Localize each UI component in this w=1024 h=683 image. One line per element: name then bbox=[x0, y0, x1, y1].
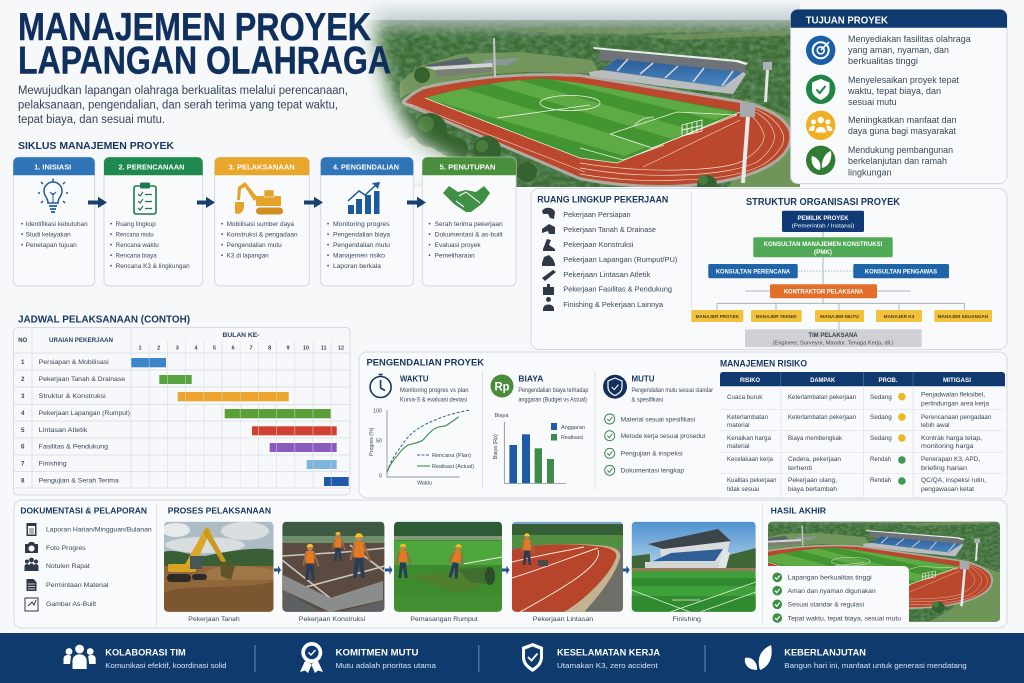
risk table: biaya bertambah bbox=[788, 486, 837, 493]
gantt chart table: URAIAN PEKERJAAN bbox=[49, 338, 113, 344]
bar chart: anggaran vs realisasi bbox=[493, 413, 585, 483]
icon: leaf bbox=[806, 146, 835, 175]
org chart: struktur organisasi proyek: KONTRAKTOR PELAKSANA bbox=[784, 288, 863, 296]
line chart: progres: 100 bbox=[373, 408, 382, 414]
risk table: lebih awal bbox=[921, 422, 950, 429]
footer band: Utamakan K3, zero accident bbox=[557, 661, 659, 670]
panel: tujuan proyek: waktu, tepat biaya, dan bbox=[847, 86, 941, 96]
risk table: monitoring harga bbox=[921, 443, 974, 450]
risk table: Cuaca buruk bbox=[727, 394, 763, 401]
panel: 4 pengendalian: Manajemen risiko bbox=[333, 254, 386, 260]
block: mutu with checklist: Dokumentasi lengkap bbox=[621, 468, 684, 475]
panel: 4 pengendalian: Pengendalian mutu bbox=[333, 243, 390, 249]
gantt chart table: 6 bbox=[231, 346, 235, 352]
org chart: struktur organisasi proyek: (PMK) bbox=[814, 250, 832, 256]
captions for process photos: Finishing bbox=[672, 616, 701, 623]
icon: quality shield bbox=[603, 375, 627, 399]
panel: 4 pengendalian: Pengendalian biaya bbox=[333, 232, 391, 238]
line chart: progres: Waktu bbox=[417, 480, 432, 486]
risk table: material bbox=[727, 443, 750, 450]
org chart: struktur organisasi proyek: MANAJER PROYEK bbox=[696, 314, 739, 320]
block: dokumentasi dan pelaporan: Foto Progres bbox=[46, 545, 86, 552]
line chart: progres: Rencana (Plan) bbox=[432, 453, 471, 459]
gantt chart table: 4 bbox=[21, 410, 25, 417]
title: LAPANGAN OLAHRAGA bbox=[18, 40, 391, 82]
risk table: RISIKO bbox=[740, 377, 760, 384]
panel: bottom strip bbox=[14, 500, 1007, 628]
panel: 3 pelaksanaan: • bbox=[221, 243, 223, 249]
org chart: struktur organisasi proyek: MANAJER K3 bbox=[884, 314, 915, 320]
ruang lingkup pekerjaan list: Finishing & Pekerjaan Lainnya bbox=[563, 300, 664, 309]
panel: 4 pengendalian: Laporan berkala bbox=[333, 264, 382, 270]
risk table: Keterlambatan pekerjaan bbox=[788, 414, 856, 421]
bar chart: anggaran vs realisasi: Realisasi bbox=[561, 435, 583, 441]
panel: 3 pelaksanaan: • bbox=[221, 254, 223, 260]
panel: tujuan proyek: Menyelesaikan proyek tepat bbox=[848, 75, 959, 85]
block: dokumentasi dan pelaporan: Gambar As-Built bbox=[46, 601, 96, 608]
captions for process photos: Pekerjaan Konstruksi bbox=[299, 616, 365, 623]
gantt chart table: 11 bbox=[321, 346, 327, 352]
gantt chart table: 3 bbox=[21, 393, 25, 400]
risk table bbox=[720, 372, 1005, 498]
panel: 3 pelaksanaan: 3. PELAKSANAAN bbox=[229, 162, 295, 172]
subtitle bbox=[18, 85, 348, 126]
risk table: Pekerjaan ulang, bbox=[788, 477, 837, 484]
gantt chart table: 6 bbox=[21, 443, 25, 450]
panel: 1 inisiasi: Identifikasi kebutuhan bbox=[26, 222, 88, 228]
block: dokumentasi dan pelaporan: Laporan Harian/Mingguan/Bulanan bbox=[46, 526, 152, 534]
org chart: struktur organisasi proyek: TIM PELAKSANA bbox=[808, 332, 858, 339]
icon: excavator bbox=[235, 182, 283, 214]
panel: tujuan proyek: berkelanjutan dan ramah bbox=[848, 156, 947, 166]
ruang lingkup pekerjaan list: Pekerjaan Lintasan Atletik bbox=[563, 270, 651, 279]
gantt chart table: Pekerjaan Tanah & Drainase bbox=[39, 376, 125, 383]
gantt chart table: Finishing bbox=[39, 460, 67, 467]
panel: tujuan proyek: berkualitas tinggi bbox=[848, 56, 918, 66]
block: mutu with checklist: Pengendalian mutu sesuai standar bbox=[632, 387, 714, 394]
block: biaya with bar chart: BIAYA bbox=[518, 374, 543, 384]
gantt bars bbox=[131, 358, 349, 486]
risk table: briefing harian bbox=[921, 465, 967, 472]
hero photo: stadium aerial bbox=[363, 2, 800, 187]
panel: 1 inisiasi bbox=[13, 157, 95, 286]
panel: 1 inisiasi: • bbox=[21, 222, 23, 228]
panel: 1 inisiasi: • bbox=[21, 243, 23, 249]
gantt chart table: 5 bbox=[21, 427, 25, 434]
org chart: struktur organisasi proyek: STRUKTUR ORGANISASI PROYEK bbox=[746, 197, 901, 208]
panel: 5 penutupan: Dokumentasi & as-built bbox=[435, 232, 503, 238]
block: mutu with checklist: MUTU bbox=[632, 374, 654, 384]
org chart: struktur organisasi proyek bbox=[691, 191, 992, 347]
gantt chart table: 4 bbox=[194, 346, 198, 352]
panel: tujuan proyek bbox=[791, 10, 1007, 184]
panel: ruang lingkup and struktur organisasi bbox=[531, 188, 1007, 350]
heading: jadwal pelaksanaan: JADWAL PELAKSANAAN (CONTOH) bbox=[18, 314, 190, 326]
icon: handshake bbox=[443, 186, 490, 212]
icon: lightbulb bbox=[38, 178, 68, 212]
block: waktu with s-curve chart bbox=[369, 374, 474, 486]
photo: pekerjaan konstruksi bbox=[282, 522, 385, 612]
line chart: progres: Realisasi (Actual) bbox=[432, 464, 474, 470]
risk table: Kenaikan harga bbox=[727, 435, 771, 442]
panel: 4 pengendalian: • bbox=[327, 254, 329, 260]
org chart: struktur organisasi proyek: MANAJER MUTU bbox=[820, 314, 859, 320]
footer band: KOMITMEN MUTU bbox=[336, 648, 419, 658]
icon: quality badge bbox=[300, 642, 323, 673]
risk table: Penjadwalan fleksibel, bbox=[921, 392, 985, 398]
footer band: Komunikasi efektif, koordinasi solid bbox=[105, 661, 226, 670]
panel: 2 perencanaan: Ruang lingkup bbox=[116, 222, 156, 228]
gantt chart table: BULAN KE- bbox=[222, 333, 260, 339]
ruang lingkup pekerjaan list: Pekerjaan Persiapan bbox=[563, 210, 631, 219]
gantt chart table bbox=[14, 328, 350, 495]
panel: pengendalian proyek and manajemen risiko bbox=[359, 352, 1007, 498]
risk table: Kualitas pekerjaan bbox=[727, 477, 777, 484]
gantt chart table: Fasilitas & Pendukung bbox=[39, 443, 108, 450]
icon: growth chart bbox=[348, 182, 380, 214]
risk table: Cedera, pekerjaan bbox=[788, 456, 841, 463]
captions for process photos: Pekerjaan Lintasan bbox=[533, 616, 594, 623]
org chart: struktur organisasi proyek: MANAJER TEKNIK bbox=[756, 314, 797, 320]
panel: tujuan proyek: daya guna bagi masyarakat bbox=[848, 126, 956, 136]
panel: 2 perencanaan: • bbox=[110, 232, 112, 238]
gantt chart table: 7 bbox=[249, 346, 253, 352]
block: dokumentasi dan pelaporan: Permintaan Material bbox=[46, 582, 109, 589]
risk table: Sedang bbox=[870, 414, 892, 421]
line chart: progres: 0 bbox=[379, 474, 382, 480]
panel: 2 perencanaan: • bbox=[110, 243, 112, 249]
panel: 5 penutupan: • bbox=[428, 222, 431, 228]
ruang lingkup pekerjaan list bbox=[537, 194, 678, 311]
panel: 2 perencanaan: Rencana biaya bbox=[116, 254, 157, 260]
gantt chart table: NO bbox=[18, 338, 28, 344]
risk table: Rendah bbox=[870, 477, 891, 484]
panel: tujuan proyek: Mendukung pembangunan bbox=[848, 145, 953, 155]
photo: finishing bbox=[632, 522, 756, 612]
panel: 2 perencanaan: • bbox=[110, 264, 112, 270]
panel: tujuan proyek: sesuai mutu bbox=[848, 97, 897, 107]
panel: 1 inisiasi: • bbox=[21, 232, 23, 238]
arrow bbox=[623, 566, 630, 574]
gantt chart table: Pekerjaan Lapangan (Rumput) bbox=[39, 410, 130, 417]
panel: 2 perencanaan: Rencana mutu bbox=[116, 232, 154, 238]
line chart: progres: 50 bbox=[376, 438, 382, 444]
panel: 3 pelaksanaan: Mobilisasi sumber daya bbox=[227, 222, 295, 228]
gantt chart table: 12 bbox=[338, 346, 344, 352]
risk table: tidak sesuai bbox=[727, 486, 759, 493]
risk table: PROB. bbox=[878, 377, 898, 384]
org chart: struktur organisasi proyek: KONSULTAN PERENCANA bbox=[716, 269, 791, 275]
panel: 1 inisiasi: 1. INISIASI bbox=[34, 162, 71, 172]
panel: 4 pengendalian: 4. PENGENDALIAN bbox=[333, 162, 399, 172]
line chart: progres: Progres (%) bbox=[369, 427, 375, 456]
arrow bbox=[274, 566, 281, 574]
org chart: struktur organisasi proyek: KONSULTAN MANAJEMEN KONSTRUKSI bbox=[764, 242, 883, 248]
photo: hasil akhir stadium bbox=[768, 522, 1000, 622]
footer band bbox=[0, 633, 1024, 683]
icon: leaves bbox=[745, 645, 772, 670]
risk table: terhenti bbox=[788, 465, 812, 472]
panel: 3 pelaksanaan bbox=[215, 157, 309, 286]
risk table: Keterlambatan bbox=[727, 414, 768, 421]
divider bbox=[482, 371, 595, 490]
block: mutu with checklist: Material sesuai spesifikasi bbox=[621, 416, 695, 423]
risk table: Kontrak harga tetap, bbox=[921, 435, 982, 442]
panel: 2 perencanaan: • bbox=[110, 254, 112, 260]
subtitle: pelaksanaan, pengendalian, dan serah terima yang tepat waktu, bbox=[18, 100, 338, 112]
icon: target bbox=[806, 36, 835, 65]
panel: 1 inisiasi: Penetapan tujuan bbox=[26, 243, 77, 249]
heading: proses pelaksanaan: PROSES PELAKSANAAN bbox=[168, 505, 271, 515]
org chart: struktur organisasi proyek: PEMILIK PROYEK bbox=[798, 215, 849, 222]
footer band: KOLABORASI TIM bbox=[105, 648, 186, 658]
photo: pemasangan rumput bbox=[394, 522, 502, 612]
arrow bbox=[385, 566, 392, 574]
risk table: Sedang bbox=[870, 435, 892, 442]
block: mutu with checklist: & spesifikasi bbox=[632, 397, 663, 404]
gantt chart table: Pengujian & Serah Terima bbox=[39, 477, 119, 484]
risk table: MITIGASI bbox=[943, 377, 971, 384]
icon: shield check bbox=[806, 75, 835, 104]
gantt chart table: 5 bbox=[213, 346, 216, 352]
panel: 5 penutupan: • bbox=[428, 254, 431, 260]
icon: team bbox=[64, 645, 96, 669]
gantt chart table: 9 bbox=[286, 346, 290, 352]
gantt chart table: 8 bbox=[268, 346, 271, 352]
gantt chart table: 7 bbox=[21, 460, 25, 467]
panel: 4 pengendalian: • bbox=[327, 222, 329, 228]
gantt chart table: Struktur & Konstruksi bbox=[39, 393, 106, 400]
risk table: Perencanaan pengadaan bbox=[921, 414, 992, 421]
risk table: QC/QA, inspeksi rutin, bbox=[921, 477, 986, 484]
risk table: Keterlambatan pekerjaan bbox=[788, 394, 856, 401]
captions for process photos bbox=[188, 616, 701, 623]
gantt chart table: Lintasan Atletik bbox=[39, 427, 88, 434]
panel: tujuan proyek: Menyediakan fasilitas olahraga bbox=[848, 34, 971, 44]
gantt chart table: 8 bbox=[21, 477, 25, 484]
gantt chart table: Persiapan & Mobilisasi bbox=[39, 359, 109, 366]
panel: 3 pelaksanaan: Konstruksi & pengadaan bbox=[227, 232, 298, 238]
heading: pengendalian proyek: PENGENDALIAN PROYEK bbox=[366, 358, 484, 368]
risk table: pengawasan ketat bbox=[921, 486, 974, 493]
block: biaya with bar chart: anggaran (Budget vs Actual) bbox=[518, 397, 587, 404]
icon: safety shield bbox=[522, 643, 543, 672]
risk table: Rendah bbox=[870, 456, 891, 463]
captions for process photos: Pemasangan Rumput bbox=[410, 616, 478, 623]
bar chart: anggaran vs realisasi: Biaya bbox=[494, 413, 509, 419]
panel: 4 pengendalian: • bbox=[327, 232, 329, 238]
gantt chart table: 10 bbox=[303, 346, 309, 352]
icon: community bbox=[806, 111, 835, 140]
footer band: KESELAMATAN KERJA bbox=[557, 648, 660, 658]
footer band: Mutu adalah prioritas utama bbox=[336, 661, 437, 670]
gantt chart table: 3 bbox=[176, 346, 179, 352]
block: biaya with bar chart: Pengendalian biaya terhadap bbox=[518, 387, 589, 394]
block: waktu with s-curve chart: Monitoring progres vs plan bbox=[400, 387, 469, 394]
icon: clock bbox=[370, 374, 391, 398]
heading: siklus manajemen proyek: SIKLUS MANAJEMEN PROYEK bbox=[18, 141, 175, 152]
panel: 5 penutupan: 5. PENUTUPAN bbox=[440, 162, 496, 172]
subtitle: tepat biaya, dan sesuai mutu. bbox=[18, 114, 165, 126]
block: biaya with bar chart bbox=[490, 374, 589, 483]
panel: 2 perencanaan: Rencana waktu bbox=[116, 243, 159, 249]
panel: tujuan proyek: lingkungan bbox=[848, 167, 892, 177]
block: dokumentasi dan pelaporan: Notulen Rapat bbox=[46, 563, 90, 570]
block: dokumentasi dan pelaporan: DOKUMENTASI & PELAPORAN bbox=[20, 505, 147, 515]
subtitle: Mewujudkan lapangan olahraga berkualitas melalui perencanaan, bbox=[18, 85, 348, 97]
footer band: KEBERLANJUTAN bbox=[784, 648, 866, 658]
risk table: Kecelakaan kerja bbox=[727, 456, 773, 463]
panel: tujuan proyek: Meningkatkan manfaat dan bbox=[848, 115, 957, 125]
gantt chart table: 2 bbox=[157, 346, 160, 352]
risk table: DAMPAK bbox=[810, 377, 836, 384]
icon: clipboard bbox=[134, 182, 156, 214]
ruang lingkup pekerjaan list: Pekerjaan Tanah & Drainase bbox=[563, 225, 656, 234]
callout: hasil akhir checklist: Lapangan berkualitas tinggi bbox=[788, 575, 872, 582]
panel: 3 pelaksanaan: K3 di lapangan bbox=[227, 254, 269, 260]
block: dokumentasi dan pelaporan bbox=[20, 503, 763, 626]
arrows between cycle stages bbox=[88, 197, 426, 208]
heading: hasil akhir: HASIL AKHIR bbox=[771, 505, 826, 515]
footer band: Bangun hari ini, manfaat untuk generasi mendatang bbox=[784, 661, 967, 670]
callout: hasil akhir checklist: Tepat waktu, tepat biaya, sesuai mutu bbox=[788, 615, 901, 622]
panel: tujuan proyek: yang aman, nyaman, dan bbox=[848, 45, 949, 55]
panel: 4 pengendalian: • bbox=[327, 264, 329, 270]
block: waktu with s-curve chart: Kurva-S & evaluasi deviasi bbox=[400, 397, 467, 404]
panel: 3 pelaksanaan: Pengendalian mutu bbox=[227, 243, 282, 249]
ruang lingkup pekerjaan list: Pekerjaan Fasilitas & Pendukung bbox=[563, 284, 672, 294]
block: mutu with checklist: Metode kerja sesuai prosedur bbox=[621, 433, 706, 440]
photo: pekerjaan lintasan bbox=[512, 522, 623, 612]
bar chart: anggaran vs realisasi: Biaya (Rp) bbox=[493, 434, 499, 459]
panel: 4 pengendalian: Monitoring progres bbox=[333, 222, 390, 228]
callout: hasil akhir checklist bbox=[768, 566, 909, 623]
panel: 5 penutupan: • bbox=[428, 243, 431, 249]
risk table: Sedang bbox=[870, 394, 892, 401]
ruang lingkup pekerjaan list: Pekerjaan Lapangan (Rumput/PU) bbox=[563, 255, 678, 264]
panel: 5 penutupan: • bbox=[428, 232, 431, 238]
panel: 5 penutupan: Evaluasi proyek bbox=[435, 243, 482, 249]
gantt chart table: 2 bbox=[21, 376, 25, 383]
panel: 2 perencanaan: 2. PERENCANAAN bbox=[118, 162, 184, 172]
captions for process photos: Pekerjaan Tanah bbox=[188, 616, 240, 623]
block: waktu with s-curve chart: WAKTU bbox=[400, 374, 428, 384]
callout: hasil akhir checklist: Aman dan nyaman digunakan bbox=[788, 588, 876, 595]
gantt chart table: 1 bbox=[138, 346, 142, 352]
risk table: Penerapan K3, APD, bbox=[921, 456, 980, 463]
icon: rupiah coin: Rp bbox=[494, 380, 510, 394]
org chart: struktur organisasi proyek: (Engineer, Surveyor, Mandor, Tenaga Kerja, dll.) bbox=[772, 340, 894, 346]
panel: tujuan proyek: TUJUAN PROYEK bbox=[806, 14, 888, 26]
risk table: material bbox=[727, 422, 750, 429]
panel: 3 pelaksanaan: • bbox=[221, 232, 223, 238]
bar chart: anggaran vs realisasi: Anggaran bbox=[561, 425, 585, 431]
panel: 1 inisiasi: Studi kelayakan bbox=[26, 232, 71, 238]
title: MANAJEMEN PROYEK bbox=[18, 6, 371, 49]
org chart: struktur organisasi proyek: KONSULTAN PENGAWAS bbox=[865, 269, 937, 275]
photo: pekerjaan tanah bbox=[162, 522, 274, 612]
panel: 5 penutupan: Pemeliharaan bbox=[435, 254, 475, 260]
panel: 3 pelaksanaan: • bbox=[221, 222, 223, 228]
callout: hasil akhir checklist: Sesuai standar & regulasi bbox=[788, 602, 864, 609]
block: mutu with checklist: Pengujian & inspeksi bbox=[621, 451, 683, 458]
panel: 2 perencanaan bbox=[104, 157, 203, 286]
ruang lingkup pekerjaan list: Pekerjaan Konstruksi bbox=[563, 240, 634, 249]
org chart: struktur organisasi proyek: (Pemerintah / Instansi) bbox=[792, 224, 855, 230]
heading: manajemen risiko: MANAJEMEN RISIKO bbox=[720, 359, 807, 370]
panel: 4 pengendalian: • bbox=[327, 243, 329, 249]
ruang lingkup pekerjaan list: RUANG LINGKUP PEKERJAAN bbox=[537, 194, 668, 206]
panel: 4 pengendalian bbox=[321, 157, 413, 286]
gantt chart table: 1 bbox=[21, 359, 25, 366]
panel: 2 perencanaan: Rencana K3 & lingkungan bbox=[116, 264, 190, 270]
arrow bbox=[502, 566, 510, 574]
org chart: struktur organisasi proyek: MANAJER KEUANGAN bbox=[938, 314, 989, 320]
panel: 2 perencanaan: • bbox=[110, 222, 112, 228]
panel: 5 penutupan bbox=[422, 157, 516, 286]
risk table: perlindungan area kerja bbox=[921, 400, 989, 408]
line chart: progres bbox=[369, 408, 474, 486]
risk table: Biaya membengkak bbox=[788, 435, 843, 442]
block: mutu with checklist bbox=[603, 374, 714, 475]
panel: 5 penutupan: Serah terima pekerjaan bbox=[435, 222, 503, 228]
title bbox=[18, 6, 391, 82]
